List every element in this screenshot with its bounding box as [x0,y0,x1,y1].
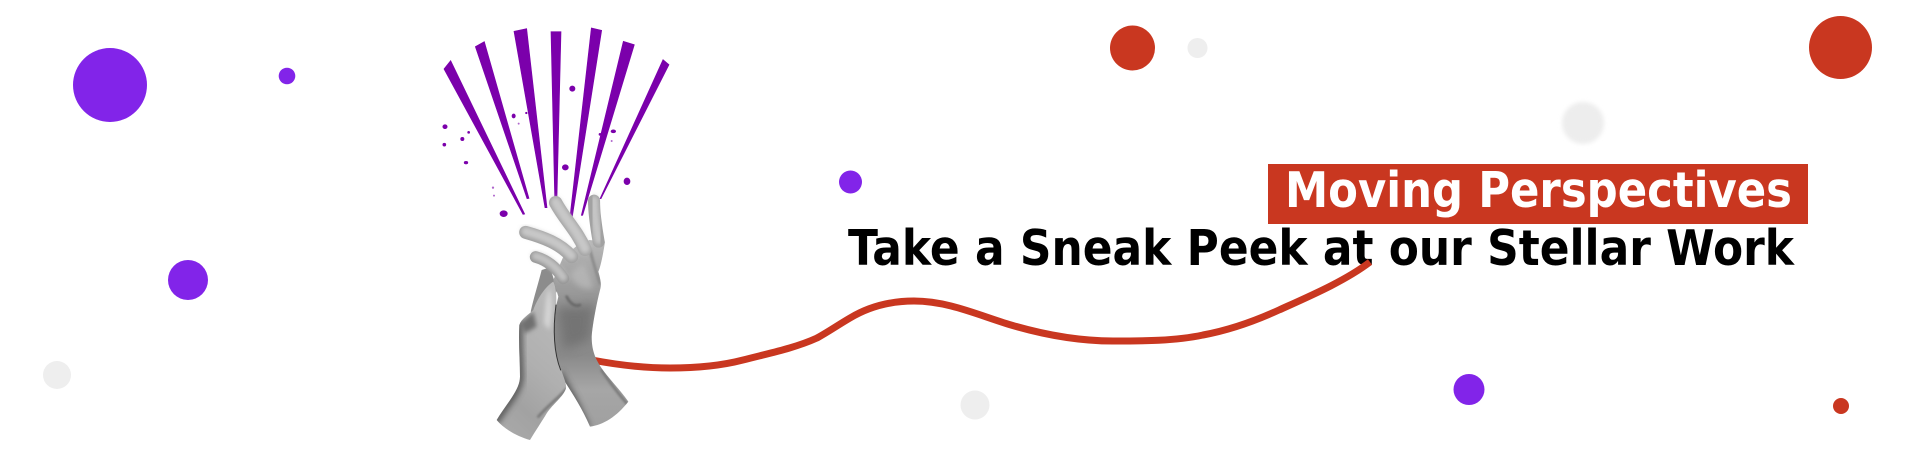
dot: grey bottom centre [960,390,990,420]
dot: purple bottom right [1454,374,1484,405]
dot: grey top centre [1188,38,1208,58]
dot: small purple top left [279,68,295,84]
dot: grey bottom left [43,361,71,389]
finger: pinky side [594,200,599,242]
left hand [497,282,566,440]
finger: middle [526,231,572,257]
dot: large purple left [73,48,147,122]
dot: red top centre [1110,26,1155,70]
dot: small red bottom right [1833,398,1849,414]
subheading: Take a Sneak Peek at our Stellar Work [848,220,1795,277]
heading badge: Moving Perspectives: Moving Perspectives [1285,162,1792,219]
dot: medium purple left [168,260,208,300]
burst: purple rays and specks [443,28,669,217]
hands: black and white clapping hands [497,200,628,440]
finger: ring [556,202,585,249]
dot: large red top right [1809,16,1872,79]
left hand far fingers [531,267,557,317]
dot: purple beside hands [839,170,862,194]
dot: blurred grey [1562,102,1604,144]
red curve [592,262,1370,368]
finger: index [536,256,563,278]
right hand palm and wrist [553,240,628,428]
